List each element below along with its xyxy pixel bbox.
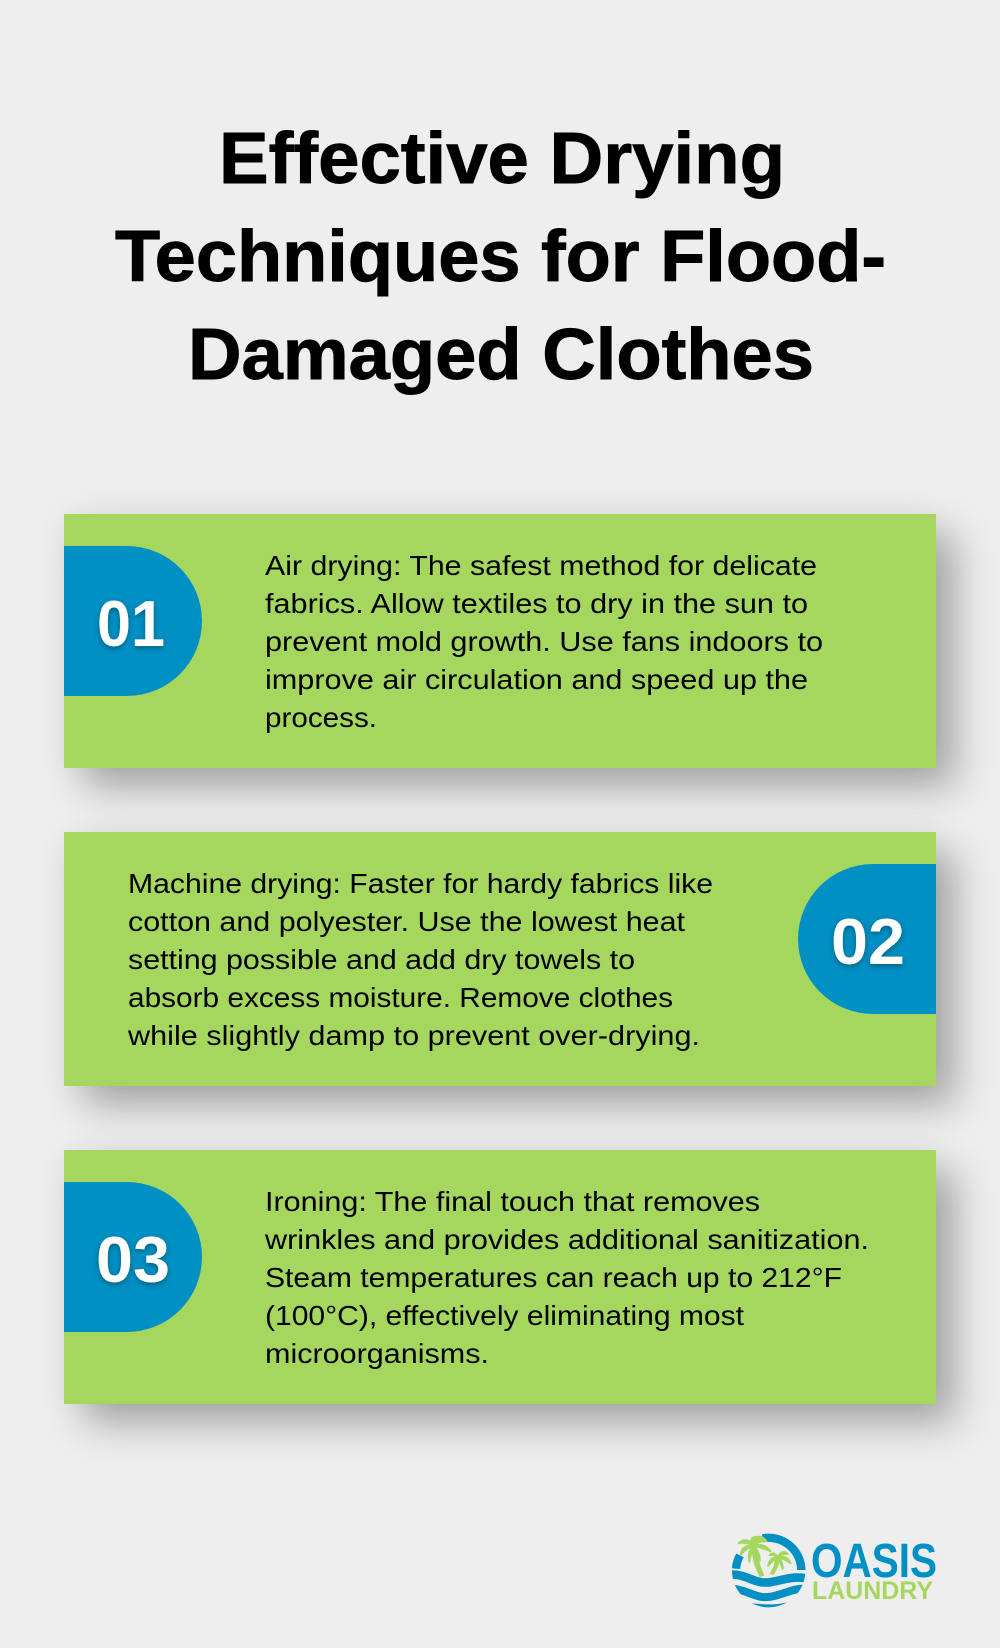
text: air drying description <box>265 550 823 733</box>
text: machine drying description <box>127 868 713 1051</box>
logo: Oasis Laundry <box>732 1534 936 1608</box>
number badge 03 <box>64 1182 202 1332</box>
number badge 03: 03 <box>96 1223 170 1296</box>
number badge 02: 02 <box>831 905 905 978</box>
text: ironing description: wrinkles and provides additional sanitization. <box>264 1224 869 1255</box>
text: air drying description: improve air circulation and speed up the <box>265 664 808 695</box>
card background 2 <box>64 832 936 1086</box>
text: machine drying description: while slightly damp to prevent over-drying. <box>127 1020 700 1051</box>
number badge 02 <box>798 864 936 1014</box>
number badge 01: 01 <box>97 587 165 660</box>
wordmark: LAUNDRY: LAUNDRY <box>812 1577 933 1605</box>
text: machine drying description: cotton and polyester. Use the lowest heat <box>128 906 685 937</box>
card background 3 <box>64 1150 936 1404</box>
text: ironing description: microorganisms. <box>265 1338 489 1369</box>
text: ironing description: (100°C), effectively eliminating most <box>265 1300 744 1331</box>
icon: palm trees and waves <box>732 1534 806 1608</box>
title <box>115 119 886 395</box>
text: ironing description: Ironing: The final touch that removes <box>265 1186 760 1217</box>
text: ironing description <box>264 1186 869 1369</box>
text: air drying description: process. <box>265 702 377 733</box>
title: Techniques for Flood- <box>115 217 886 297</box>
wordmark: OASIS: OASIS <box>811 1535 937 1588</box>
panel: air drying <box>64 514 936 768</box>
number badge 01 <box>64 546 202 696</box>
card background 1 <box>64 514 936 768</box>
title: Damaged Clothes <box>188 315 814 395</box>
text: machine drying description: setting possible and add dry towels to <box>128 944 635 975</box>
text: machine drying description: absorb excess moisture. Remove clothes <box>128 982 673 1013</box>
text: machine drying description: Machine drying: Faster for hardy fabrics like <box>128 868 713 899</box>
panel: ironing <box>64 1150 936 1404</box>
text: ironing description: Steam temperatures can reach up to 212°F <box>265 1262 842 1293</box>
title: Effective Drying <box>219 119 785 199</box>
text: air drying description: fabrics. Allow textiles to dry in the sun to <box>265 588 808 619</box>
text: air drying description: Air drying: The safest method for delicate <box>265 550 817 581</box>
text: air drying description: prevent mold growth. Use fans indoors to <box>265 626 823 657</box>
panel: machine drying <box>64 832 936 1086</box>
